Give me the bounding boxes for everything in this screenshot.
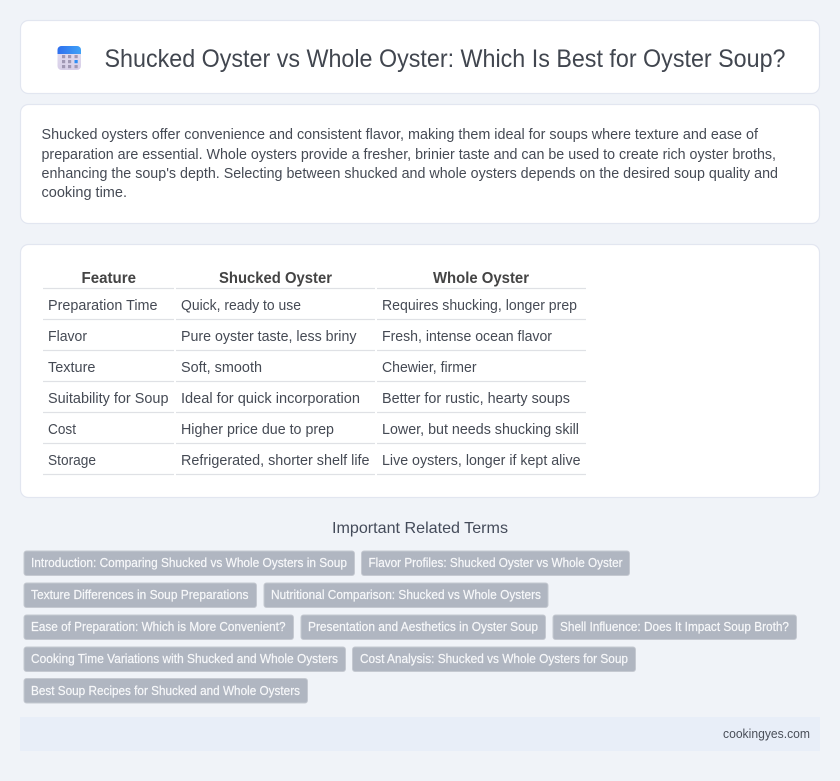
heading: important related terms: Important Related Terms [332,520,508,537]
tag: Cooking Time Variations with Shucked and Whole Oysters [31,652,338,666]
tag: Flavor Profiles: Shucked Oyster vs Whole Oyster [368,556,622,570]
tag [24,678,308,703]
tag [553,615,796,640]
column: shucked oyster: Refrigerated, shorter shelf life [181,453,370,469]
text block: introduction paragraph: preparation are essential. Whole oysters provide a fresher, brinier taste and can be used to create rich oyster broths, [42,147,776,163]
table header [82,270,529,287]
text block: introduction paragraph: enhancing the soup's depth. Selecting between shucked and whole oysters depends on the desired soup quality and [42,166,778,182]
tag: Best Soup Recipes for Shucked and Whole Oysters [31,684,300,698]
tag [362,551,630,576]
tag: Nutritional Comparison: Shucked vs Whole Oysters [271,588,541,602]
column: shucked oyster [181,298,370,469]
column: whole oyster: Better for rustic, hearty soups [382,391,570,407]
table header: Whole Oyster [433,270,529,287]
tag: Introduction: Comparing Shucked vs Whole Oysters in Soup [31,556,347,570]
table header: Feature [82,270,136,287]
footer text: site name: cookingyes.com [723,726,810,741]
table header: Shucked Oyster [219,270,332,287]
text block: introduction paragraph: Shucked oysters offer convenience and consistent flavor, making them ideal for soups where texture and ease of [42,127,759,143]
column: whole oyster: Fresh, intense ocean flavor [382,329,552,345]
column: shucked oyster: Ideal for quick incorporation [181,391,360,407]
column: whole oyster: Live oysters, longer if kept alive [382,453,580,469]
tag [24,647,346,672]
title: Shucked Oyster vs Whole Oyster: Which Is Best for Oyster Soup? [104,46,786,73]
footer [20,717,820,751]
column: whole oyster: Chewier, firmer [382,360,477,376]
panel: title header [20,20,820,94]
column: feature: Cost [48,422,76,438]
column: feature: Texture [48,360,96,376]
tag [24,551,354,576]
column: whole oyster [382,298,580,469]
column: shucked oyster: Higher price due to prep [181,422,334,438]
column: whole oyster: Lower, but needs shucking skill [382,422,579,438]
tag: Presentation and Aesthetics in Oyster Soup [308,620,538,634]
column: whole oyster: Requires shucking, longer prep [382,298,577,314]
column: feature: Suitability for Soup [48,391,168,407]
tag [24,583,256,608]
column: shucked oyster: Pure oyster taste, less briny [181,329,357,345]
tag [264,583,548,608]
column: feature: Storage [48,453,96,469]
column: feature: Preparation Time [48,298,158,314]
icon: calendar [58,46,81,70]
tag [352,647,636,672]
tag: Texture Differences in Soup Preparations [31,588,248,602]
column: feature: Flavor [48,329,87,345]
column: shucked oyster: Soft, smooth [181,360,262,376]
tag: Shell Influence: Does It Impact Soup Broth? [560,620,789,634]
related terms tags [24,551,796,703]
text block: introduction paragraph: cooking time. [42,185,127,201]
column: shucked oyster: Quick, ready to use [181,298,301,314]
tag [301,615,546,640]
tag [24,615,294,640]
column: feature [48,298,168,469]
tag: Ease of Preparation: Which is More Convenient? [31,620,286,634]
panel: comparison table [20,244,820,498]
panel: introduction [20,104,820,224]
text block: introduction paragraph [42,127,778,201]
tag: Cost Analysis: Shucked vs Whole Oysters for Soup [360,652,628,666]
